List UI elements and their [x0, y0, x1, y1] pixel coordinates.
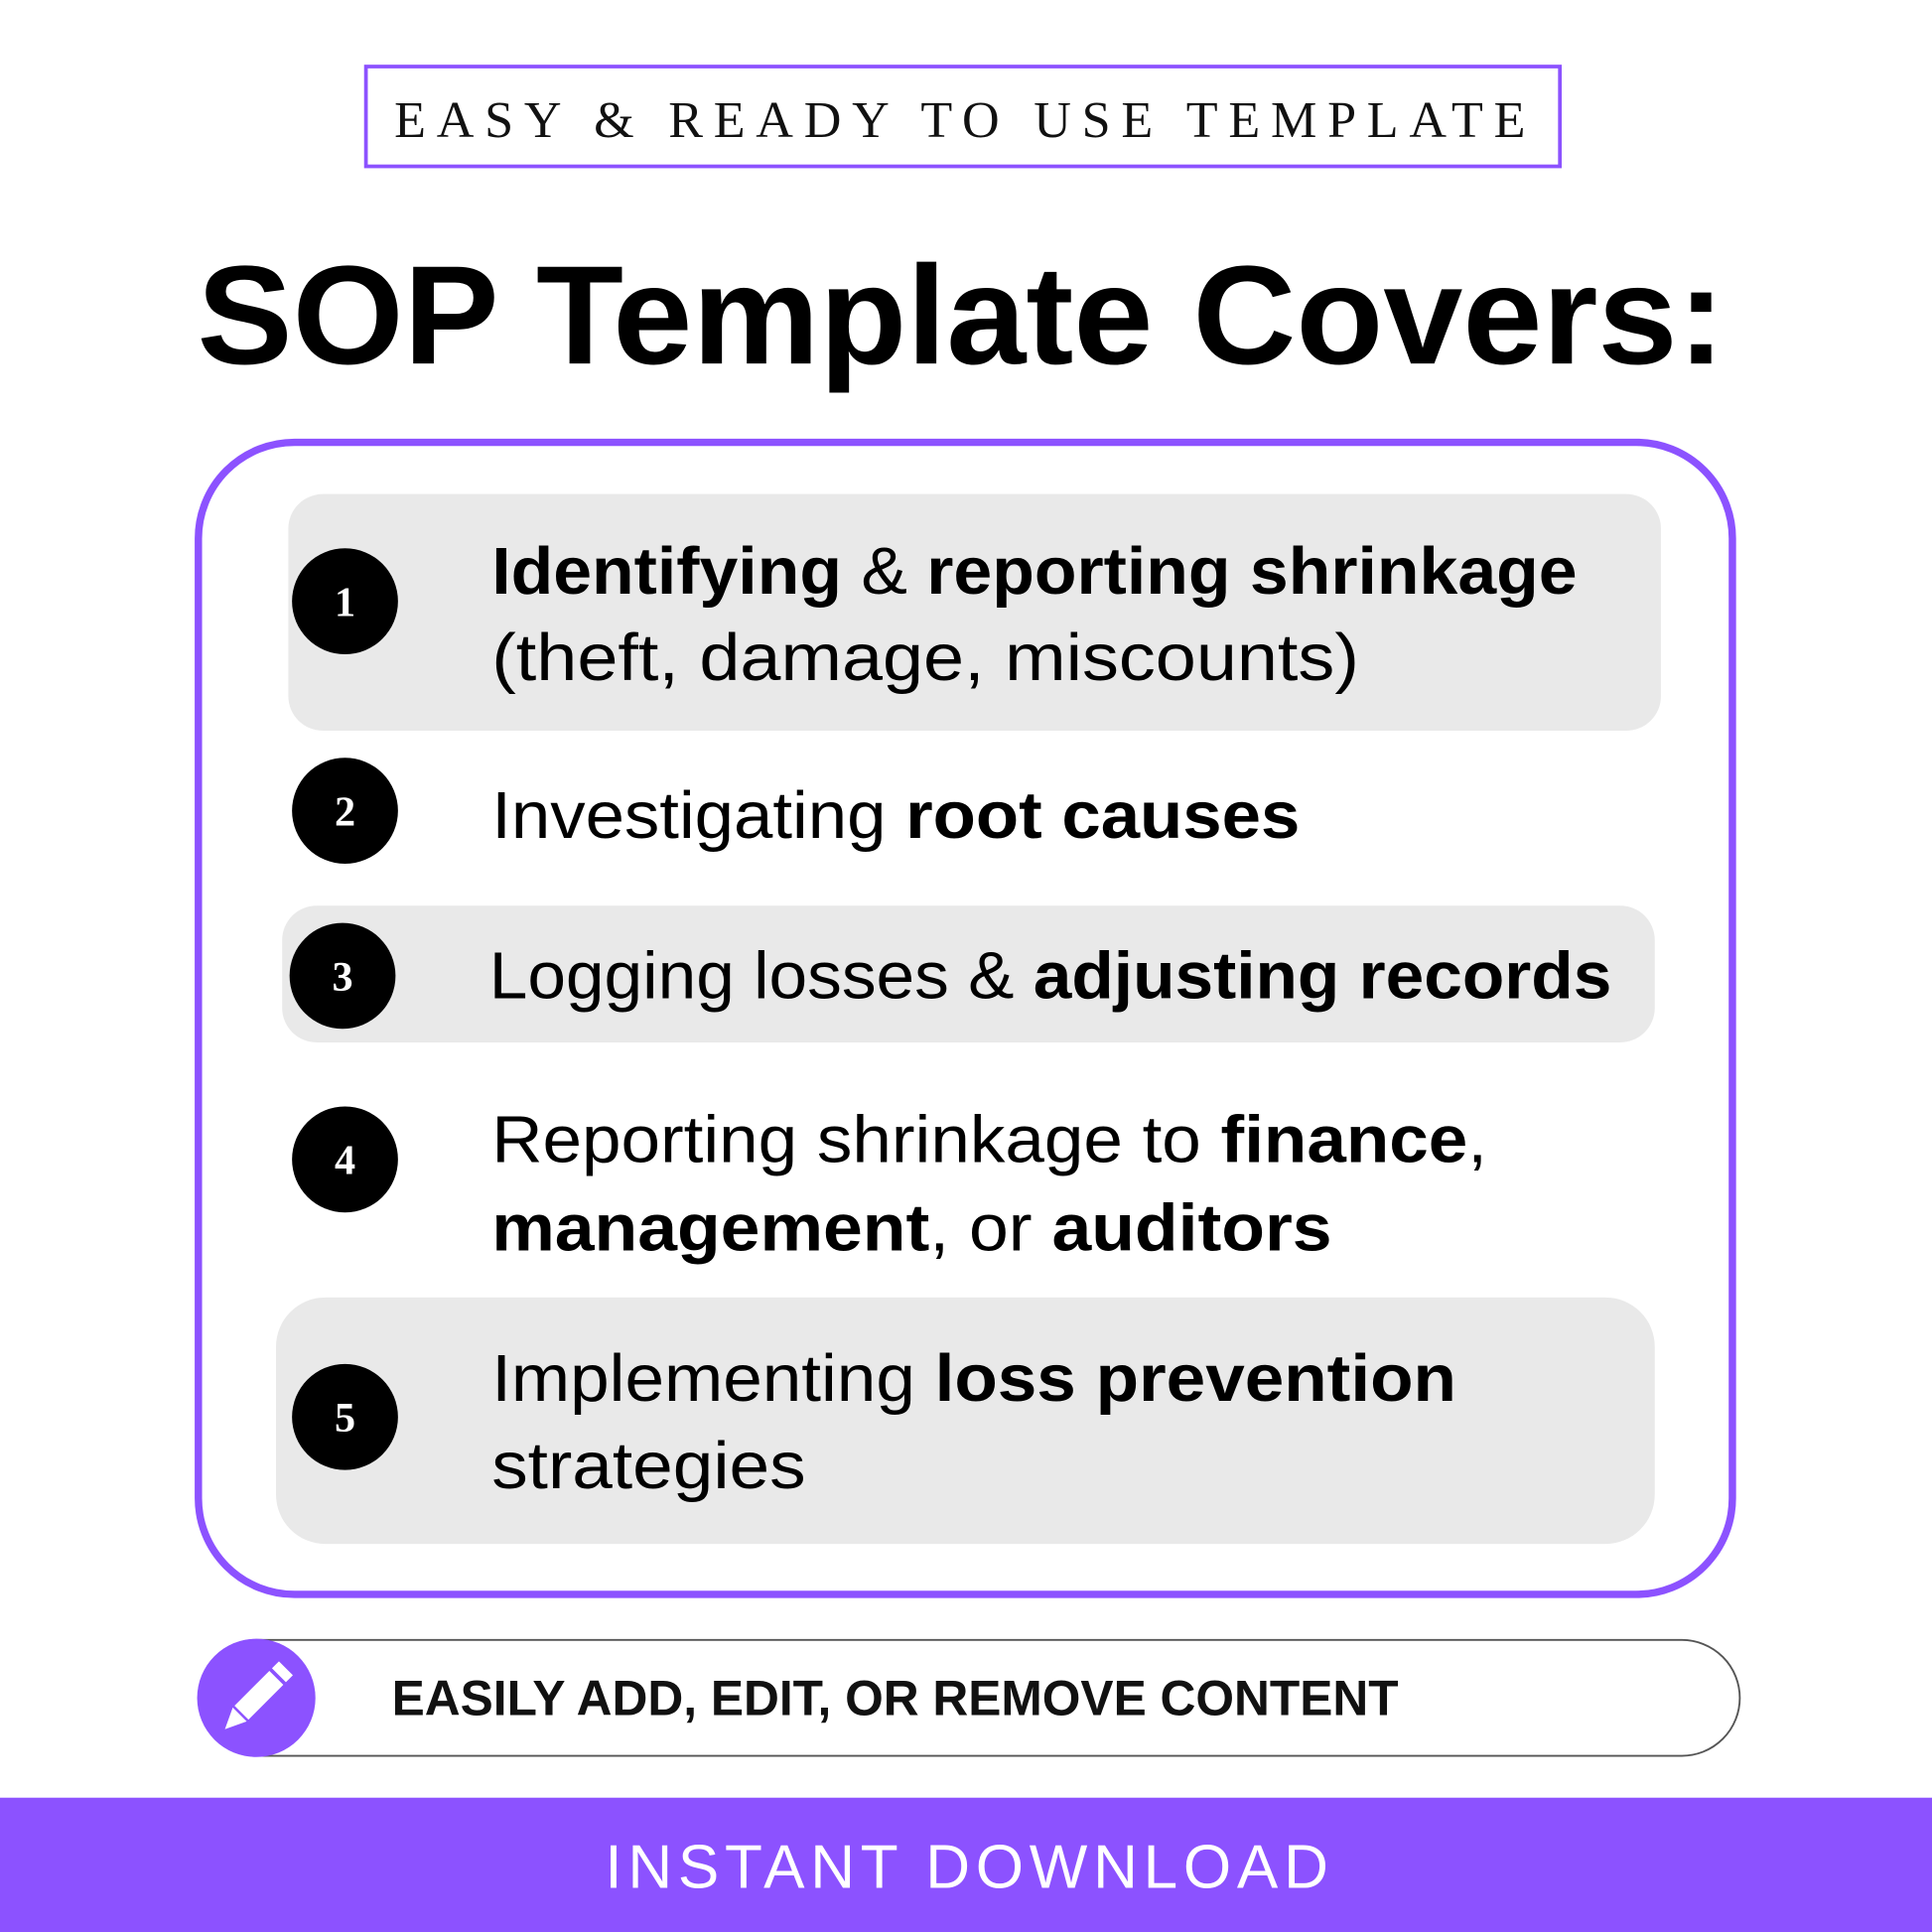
panel: list [199, 443, 1732, 1594]
footer band [0, 1798, 1932, 1932]
item 5: 5 [335, 1395, 355, 1442]
edit banner: EASILY ADD, EDIT, OR REMOVE CONTENT [392, 1671, 1399, 1726]
item 2 [292, 758, 1300, 864]
item 4: 4 [335, 1138, 355, 1184]
item 5 [276, 1298, 1655, 1544]
top label box: EASY & READY TO USE TEMPLATE [394, 92, 1525, 149]
icon: pencil [198, 1639, 316, 1757]
item 1 [288, 494, 1661, 731]
item 1: (theft, damage, miscounts) [491, 621, 1359, 695]
item 4: Reporting shrinkage to finance , [491, 1102, 1487, 1176]
item 5: strategies [491, 1429, 806, 1503]
item 2: 2 [335, 789, 355, 836]
item 4 [292, 1102, 1487, 1266]
item 1: 1 [335, 580, 355, 626]
top label box [366, 67, 1560, 167]
item 5: Implementing loss prevention [491, 1341, 1456, 1416]
edit banner [198, 1639, 1739, 1757]
item 2: Investigating root causes [491, 778, 1300, 853]
item 3: 3 [332, 954, 353, 1001]
item 3 [282, 905, 1655, 1042]
item 3: Logging losses & adjusting records [489, 938, 1611, 1013]
item 4: management , or auditors [491, 1191, 1332, 1266]
footer band: INSTANT DOWNLOAD [605, 1833, 1328, 1901]
item 1: Identifying & reporting shrinkage [491, 534, 1578, 609]
title: SOP Template Covers: [198, 236, 1725, 393]
